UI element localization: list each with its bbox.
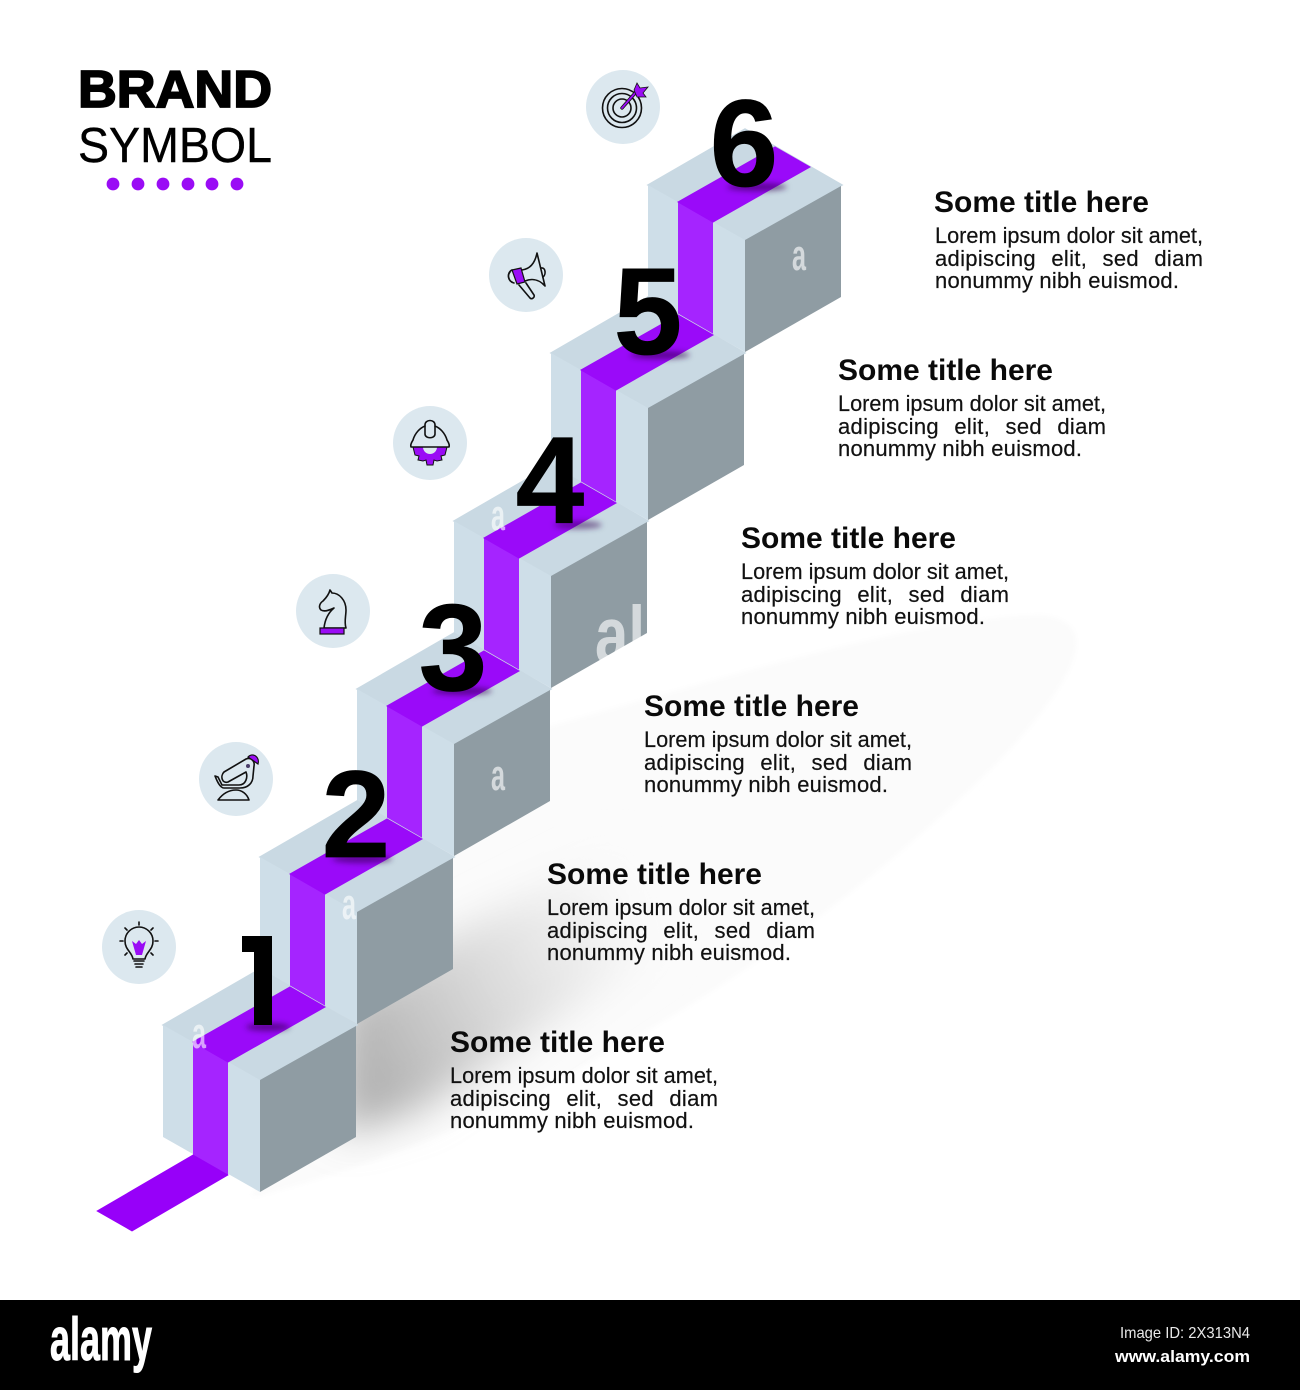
icon: megaphone (489, 238, 563, 312)
watermarks on blocks (192, 231, 806, 1058)
step 2 block (260, 801, 454, 1024)
number 2: 2 (322, 747, 390, 884)
text block 1: adipiscing elit, sed diam (450, 1086, 718, 1111)
footer bar: www.alamy.com (1114, 1347, 1250, 1366)
text block 1: Some title here (450, 1026, 665, 1059)
text block 3: Lorem ipsum dolor sit amet, (644, 727, 912, 752)
text block 3: nonummy nibh euismod. (644, 772, 888, 797)
text block 2: adipiscing elit, sed diam (547, 918, 815, 943)
text block 5 (838, 354, 1106, 461)
text block 6: nonummy nibh euismod. (935, 268, 1179, 293)
watermarks on blocks: a (192, 1009, 206, 1058)
text block 3: adipiscing elit, sed diam (644, 750, 912, 775)
text block 4: Some title here (741, 522, 956, 555)
number 4: 4 (516, 413, 584, 550)
text block 5: Some title here (838, 354, 1053, 387)
text block 4 (741, 522, 1009, 629)
ground ribbon (97, 1155, 228, 1231)
logo (78, 61, 272, 190)
text block 6: adipiscing elit, sed diam (935, 246, 1203, 271)
text block 5: adipiscing elit, sed diam (838, 414, 1106, 439)
text block 5: nonummy nibh euismod. (838, 436, 1082, 461)
text block 3 (644, 690, 912, 797)
logo: SYMBOL (78, 119, 272, 173)
watermarks on blocks: al (595, 590, 645, 679)
text block 1: nonummy nibh euismod. (450, 1108, 694, 1133)
step 4 block (454, 465, 648, 688)
icon: light bulb (102, 910, 176, 984)
text block 5: Lorem ipsum dolor sit amet, (838, 391, 1106, 416)
text block 2: Some title here (547, 858, 762, 891)
text block 4: adipiscing elit, sed diam (741, 582, 1009, 607)
text block 1 (450, 1026, 718, 1133)
icon: target with arrow (586, 70, 660, 144)
text block 3: Some title here (644, 690, 859, 723)
text block 2: Lorem ipsum dolor sit amet, (547, 895, 815, 920)
step 3 block (357, 633, 551, 856)
number 3: 3 (419, 580, 487, 717)
cast shadow (250, 615, 1076, 1198)
step 1 block (163, 969, 357, 1192)
footer bar (0, 1300, 1300, 1390)
text block 4: nonummy nibh euismod. (741, 604, 985, 629)
text block 2 (547, 858, 815, 965)
watermarks on blocks: a (792, 231, 806, 280)
number 5: 5 (614, 244, 682, 381)
footer bar: alamy (50, 1306, 152, 1373)
text block 1: Lorem ipsum dolor sit amet, (450, 1063, 718, 1088)
number 6: 6 (710, 76, 778, 213)
icon: microscope (199, 742, 273, 816)
text block 6: Some title here (934, 186, 1149, 219)
watermarks on blocks: a (491, 491, 505, 540)
icon: chess knight (296, 574, 370, 648)
step 6 block (648, 129, 842, 352)
step 5 block (551, 297, 745, 520)
icon: helmet and gear (393, 406, 467, 480)
footer bar: Image ID: 2X313N4 (1120, 1325, 1250, 1342)
number 1 (242, 936, 292, 1035)
text block 2: nonummy nibh euismod. (547, 940, 791, 965)
text block 6: Lorem ipsum dolor sit amet, (935, 223, 1203, 248)
watermarks on blocks: a (342, 880, 356, 929)
watermarks on blocks: a (491, 751, 505, 800)
logo: BRAND (78, 61, 272, 119)
number 1: 1 (225, 915, 293, 1052)
text block 4: Lorem ipsum dolor sit amet, (741, 559, 1009, 584)
text block 6 (934, 186, 1203, 293)
